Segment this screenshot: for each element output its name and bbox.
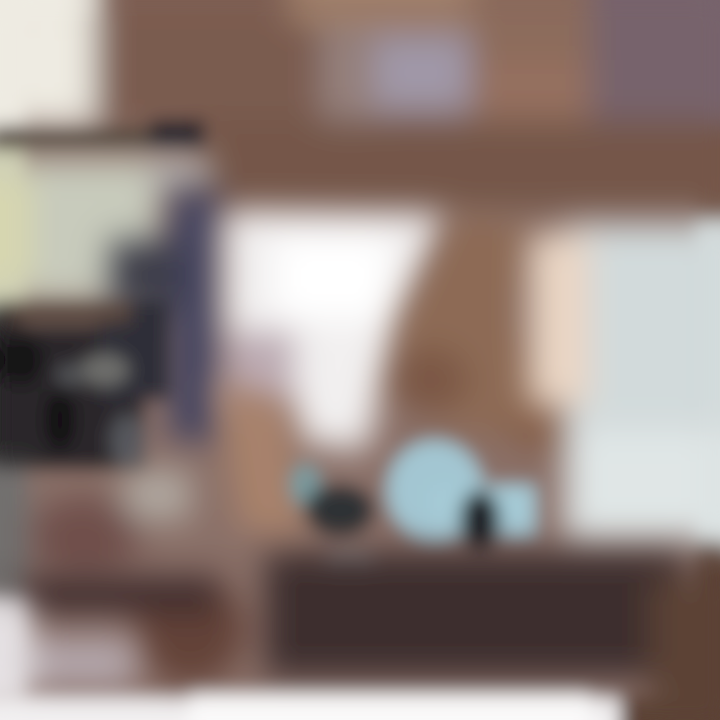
pale left panel — [0, 160, 210, 300]
upper wall area — [0, 0, 720, 210]
slate vertical strip — [110, 190, 220, 440]
white bottom strip — [0, 694, 620, 720]
blue object — [289, 440, 535, 576]
pale right panel — [530, 225, 720, 540]
dark lower band — [20, 552, 720, 720]
lower left pale area — [0, 605, 135, 695]
white central panel — [225, 212, 445, 450]
brown central figure — [385, 215, 572, 454]
lower left pale and brown shapes — [0, 380, 305, 580]
dark horizontal band — [0, 120, 205, 148]
dark left cluster — [0, 300, 170, 470]
